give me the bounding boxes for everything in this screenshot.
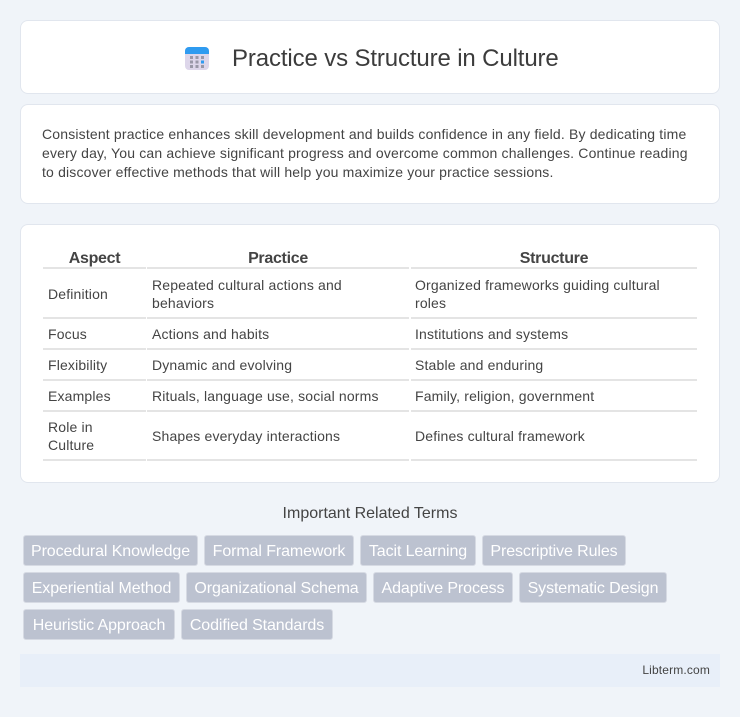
tag (204, 535, 354, 566)
related terms heading: Important Related Terms (283, 505, 457, 522)
intro text: Consistent practice enhances skill development and builds confidence in any field. By dedicating time (42, 126, 686, 142)
tag (519, 572, 667, 603)
comparison table card: Family, religion, government (415, 388, 594, 404)
comparison table card: Defines cultural framework (415, 428, 585, 444)
footer credit: Libterm.com (642, 663, 710, 677)
tag: Procedural Knowledge (31, 543, 190, 560)
row: Focus: Focus (48, 326, 87, 342)
row: Role in Culture (48, 419, 94, 453)
comparison table card: Repeated cultural actions and (152, 277, 342, 293)
tag: Experiential Method (32, 580, 171, 597)
tag (360, 535, 476, 566)
tag: Prescriptive Rules (490, 543, 618, 560)
title card (20, 20, 720, 94)
tag: Heuristic Approach (33, 617, 165, 634)
tag (373, 572, 513, 603)
related terms tags (23, 535, 667, 640)
tag: Tacit Learning (369, 543, 467, 560)
title: Practice vs Structure in Culture (232, 45, 559, 72)
header: Practice: Practice (248, 250, 308, 267)
tag (482, 535, 626, 566)
comparison table card: Institutions and systems (415, 326, 568, 342)
comparison table card: roles (415, 295, 446, 311)
tag (186, 572, 367, 603)
row: Flexibility: Flexibility (48, 357, 107, 373)
comparison table card: Actions and habits (152, 326, 269, 342)
footer (20, 654, 720, 687)
tag: Systematic Design (528, 580, 658, 597)
tag (23, 572, 180, 603)
tag (23, 535, 198, 566)
comparison table card: Stable and enduring (415, 357, 543, 373)
header: Structure: Structure (520, 250, 588, 267)
header: Aspect: Aspect (69, 250, 120, 267)
row: Role in Culture: Culture (48, 437, 94, 453)
comparison table card: Organized frameworks guiding cultural (415, 277, 660, 293)
comparison table card: behaviors (152, 295, 214, 311)
tag: Organizational Schema (194, 580, 359, 597)
icon: calendar (185, 47, 209, 70)
tag (181, 609, 333, 640)
tag: Formal Framework (213, 543, 345, 560)
intro text: to discover effective methods that will help you maximize your practice sessions. (42, 164, 554, 180)
intro text: every day, You can achieve significant progress and overcome common challenges. Continue reading (42, 145, 688, 161)
row: Definition: Definition (48, 286, 108, 302)
comparison table card (20, 224, 720, 483)
row: Role in Culture: Role in (48, 419, 93, 435)
comparison table card: Shapes everyday interactions (152, 428, 340, 444)
intro text (42, 126, 688, 180)
row: Examples: Examples (48, 388, 111, 404)
tag: Codified Standards (190, 617, 324, 634)
comparison table card: Rituals, language use, social norms (152, 388, 379, 404)
tag (23, 609, 175, 640)
comparison table card: Dynamic and evolving (152, 357, 292, 373)
tag: Adaptive Process (382, 580, 504, 597)
intro card (20, 104, 720, 204)
